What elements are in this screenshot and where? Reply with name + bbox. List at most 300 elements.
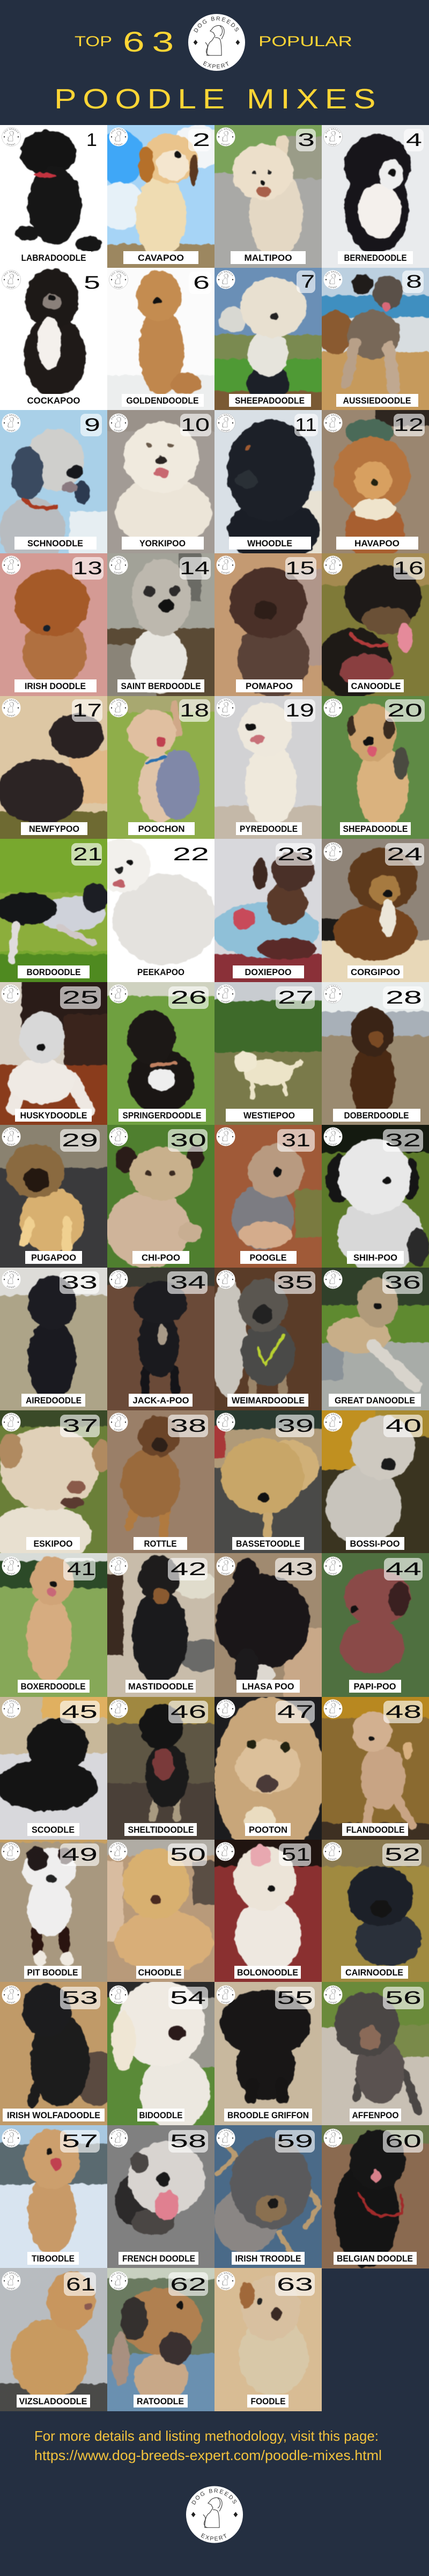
photo (102, 1262, 220, 1418)
photo (0, 262, 113, 418)
number (382, 1843, 421, 1866)
logo: DOG BREEDS (325, 985, 341, 991)
number: 1 (86, 130, 97, 150)
name (346, 1537, 404, 1550)
logo: EXPERT (328, 714, 338, 717)
name (231, 251, 306, 264)
number: 31 (282, 1130, 310, 1151)
name: RATOODLE (137, 2396, 184, 2406)
card 41: boxerdoodle (0, 1548, 113, 1703)
name: POOGLE (250, 1253, 286, 1263)
photo (0, 1692, 113, 1847)
logo (109, 2128, 128, 2148)
card 39: bassetoodle (209, 1405, 327, 1561)
name: POOTON (249, 1825, 287, 1835)
name (240, 1251, 297, 1264)
logo: EXPERT (328, 429, 337, 431)
number (276, 986, 315, 1009)
photo (316, 2120, 429, 2275)
logo: EXPERT (6, 2144, 16, 2147)
name: FOODLE (251, 2396, 285, 2406)
number (382, 1271, 423, 1294)
number: 29 (62, 1130, 98, 1151)
name: BOXERDOODLE (20, 1681, 86, 1692)
card 35: weimardoodle (209, 1262, 327, 1418)
logo (324, 1270, 342, 1289)
logo: EXPERT (328, 1143, 338, 1146)
logo: DOG BREEDS (110, 128, 126, 134)
number (82, 129, 101, 151)
number: 44 (386, 1559, 421, 1579)
number: 3 (298, 130, 315, 150)
number (168, 1558, 208, 1580)
name: SCOODLE (32, 1825, 75, 1835)
title: poodle mixes: POODLE MIXES (54, 84, 382, 115)
photo (209, 1692, 327, 1858)
number: 49 (62, 1845, 98, 1865)
name (134, 1537, 187, 1550)
name: TIBOODLE (32, 2253, 75, 2264)
card 6: goldendoodle (102, 262, 220, 418)
logo: DOG BREEDS (217, 1842, 233, 1849)
logo: DOG BREEDS (3, 2272, 19, 2278)
photo (316, 1119, 429, 1275)
logo: EXPERT (6, 429, 15, 431)
logo: DOG BREEDS (218, 1128, 234, 1134)
number (285, 557, 316, 580)
name: POOCHON (138, 824, 184, 834)
number: 53 (62, 1988, 98, 2008)
logo (217, 2128, 235, 2148)
logo (2, 699, 20, 717)
name (122, 537, 204, 550)
name: BASSETOODLE (236, 1539, 300, 1549)
name (236, 679, 302, 692)
photo (102, 548, 220, 704)
name: SPRINGERDOODLE (122, 1110, 202, 1121)
logo: EXPERT (328, 571, 337, 574)
title word: top: TOP (75, 33, 112, 49)
name: PAPI-POO (354, 1681, 396, 1692)
name (18, 965, 90, 978)
logo: DOG BREEDS (218, 1700, 234, 1706)
logo: DOG BREEDS (325, 2129, 341, 2135)
logo: EXPERT (328, 1285, 338, 1289)
card 45: scoodle (0, 1692, 113, 1847)
number (276, 1701, 315, 1723)
logo (217, 1413, 235, 1432)
photo (102, 1977, 220, 2132)
number: 24 (387, 844, 423, 865)
number: 13 (73, 558, 102, 579)
number: 26 (171, 987, 207, 1008)
logo: DOG BREEDS (325, 128, 341, 134)
name: BOSSI-POO (350, 1539, 400, 1549)
number: 7 (301, 272, 315, 292)
number: 4 (406, 130, 422, 150)
number (168, 1843, 207, 1866)
name: AFFENPOO (352, 2110, 399, 2120)
name: BORDOODLE (27, 967, 80, 977)
name: ROTTLE (144, 1539, 177, 1549)
logo: DOG BREEDS (325, 1557, 341, 1563)
card 63: foodle (209, 2263, 327, 2418)
number: 6 (193, 273, 210, 293)
name: FLANDOODLE (346, 1825, 404, 1835)
number (168, 986, 209, 1009)
logo (324, 1127, 342, 1146)
logo (109, 413, 128, 433)
card 29: pugapoo (0, 1119, 113, 1275)
number (180, 414, 211, 436)
photo (316, 1548, 429, 1703)
name: WESTIEPOO (243, 1110, 295, 1121)
photo (102, 1548, 223, 1703)
logo: DOG BREEDS (110, 1986, 127, 1992)
logo: DOG BREEDS (3, 414, 19, 420)
name (14, 537, 97, 550)
number (60, 2130, 100, 2153)
photo (0, 1834, 113, 1990)
card 26: springerdoodle (102, 977, 220, 1132)
card 51: bolonoodle (209, 1834, 327, 1990)
name: GREAT DANOODLE (335, 1395, 415, 1406)
number: 37 (62, 1416, 98, 1436)
logo (324, 699, 342, 717)
number: 15 (285, 558, 315, 579)
logo (109, 556, 128, 574)
logo: DOG BREEDS (3, 1128, 19, 1134)
name (229, 537, 311, 550)
logo: EXPERT (6, 1715, 16, 1718)
photo (209, 2263, 327, 2418)
photo (0, 1977, 118, 2132)
photo (94, 833, 220, 989)
number: 9 (84, 415, 100, 435)
logo: DOG BREEDS (3, 1270, 19, 1277)
logo (2, 1127, 20, 1146)
logo: EXPERT (221, 2287, 231, 2290)
number (383, 1701, 423, 1723)
logo: EXPERT (6, 143, 15, 146)
number (72, 699, 102, 722)
photo (209, 120, 327, 275)
logo: DOG BREEDS (218, 985, 234, 991)
name: PIT BOODLE (27, 1967, 78, 1978)
logo: DOG BREEDS (3, 699, 19, 705)
number (394, 557, 425, 580)
logo: DOG BREEDS (3, 557, 19, 562)
photo (102, 691, 220, 846)
footer line 1: For more details and listing methodology, visit this page: (34, 2428, 379, 2444)
logo: EXPERT (328, 1857, 337, 1861)
number (60, 1701, 100, 1723)
logo: DOG BREEDS (3, 1557, 19, 1563)
name: SHIH-POO (353, 1253, 397, 1263)
card 43: lhasa poo (209, 1548, 327, 1703)
number (168, 843, 210, 866)
logo (324, 1699, 342, 1718)
logo: EXPERT (114, 1715, 123, 1718)
logo: DOG BREEDS (3, 271, 19, 276)
photo (0, 548, 113, 704)
name: MASTIDOODLE (128, 1681, 194, 1692)
name: AUSSIEDOODLE (343, 396, 411, 406)
name: COCKAPOO (27, 396, 80, 406)
name (236, 1680, 300, 1693)
card 49: pit boodle (0, 1834, 113, 1990)
logo (217, 699, 235, 717)
logo (324, 984, 342, 1004)
logo: EXPERT (114, 429, 122, 431)
logo: EXPERT (6, 571, 15, 574)
card 59: irish troodle (209, 2120, 327, 2275)
name: SCHNOODLE (27, 538, 83, 548)
card 18: poochon (102, 691, 220, 846)
name: BOLONOODLE (237, 1967, 298, 1978)
number (168, 2272, 208, 2296)
logo (216, 1842, 235, 1861)
logo (109, 2271, 128, 2290)
number (168, 1415, 208, 1437)
logo: DOG BREEDS (110, 271, 126, 276)
photo (102, 1692, 220, 1847)
photo (209, 1262, 327, 1418)
number: 30 (170, 1130, 206, 1151)
name: CAVAPOO (138, 253, 184, 263)
logo: DOG BREEDS (324, 1842, 341, 1849)
name (233, 965, 304, 978)
logo: DOG BREEDS (3, 1986, 19, 1992)
name (123, 251, 198, 264)
logo: EXPERT (221, 2144, 231, 2147)
photo (209, 1548, 327, 1703)
name: SHEPADOODLE (343, 824, 408, 834)
logo (109, 270, 128, 289)
number (168, 1987, 208, 2009)
logo (2, 128, 20, 146)
photo (316, 1692, 429, 1847)
card 16: canoodle (316, 548, 429, 704)
card 42: mastidoodle (102, 1548, 223, 1703)
logo: EXPERT (6, 1857, 16, 1861)
name (226, 1109, 313, 1122)
number (79, 272, 104, 294)
photo (102, 262, 220, 418)
photo (0, 691, 113, 846)
logo: dog breeds expert (188, 14, 245, 71)
number: 22 (173, 844, 209, 865)
number: 58 (170, 2131, 206, 2151)
number: 63 (277, 2274, 313, 2295)
logo: DOG BREEDS (325, 1128, 341, 1134)
logo (2, 2271, 20, 2290)
logo: EXPERT (221, 1285, 231, 1289)
logo: DOG BREEDS (110, 557, 126, 562)
photo (316, 405, 429, 560)
name: PUGAPOO (31, 1253, 76, 1263)
logo: EXPERT (221, 1000, 231, 1003)
logo: DOG BREEDS (3, 1700, 19, 1706)
logo: DOG BREEDS (3, 985, 19, 991)
logo: DOG BREEDS (325, 414, 341, 420)
number: 42 (171, 1559, 206, 1579)
card 58: french doodle (102, 2120, 220, 2275)
name (25, 1251, 82, 1264)
number: 61 (66, 2274, 95, 2295)
number: 19 (285, 700, 314, 721)
photo (102, 405, 220, 560)
photo (316, 1262, 429, 1418)
logo: DOG BREEDS (110, 2129, 127, 2135)
logo (2, 556, 20, 574)
logo: DOG BREEDS (110, 1270, 127, 1277)
photo (316, 548, 429, 704)
name: PYREDOODLE (240, 824, 298, 834)
card 27: westiepoo (209, 977, 327, 1132)
number: 25 (62, 987, 99, 1008)
number (275, 1271, 315, 1294)
logo (109, 128, 128, 146)
logo: DOG BREEDS (110, 1557, 127, 1563)
photo (209, 1405, 327, 1561)
number: 38 (170, 1416, 206, 1436)
logo (2, 1270, 20, 1289)
number: 12 (394, 415, 424, 435)
number: 45 (62, 1702, 98, 1722)
name: BERNEDOODLE (344, 253, 406, 263)
name: BROODLE GRIFFON (227, 2110, 309, 2120)
logo: EXPERT (6, 1285, 16, 1289)
number (402, 270, 424, 293)
logo: EXPERT (328, 143, 337, 146)
card 40: bossi-poo (316, 1405, 429, 1561)
logo: EXPERT (114, 1000, 123, 1003)
logo: EXPERT (328, 2144, 338, 2147)
card 25: huskydoodle (0, 977, 113, 1132)
logo (217, 413, 235, 433)
card 57: tiboodle (0, 2120, 113, 2275)
card 22: peekapoo (94, 833, 220, 989)
number (63, 1558, 95, 1580)
logo: EXPERT (6, 1000, 16, 1003)
footer line 2: url: https://www.dog-breeds-expert.com/poodle-mixes.html (34, 2447, 382, 2463)
number (383, 1415, 423, 1437)
number (60, 986, 101, 1009)
card 34: jack-a-poo (102, 1262, 220, 1418)
title word: popular: POPULAR (258, 33, 352, 49)
card 11: whoodle (209, 405, 327, 563)
photo (316, 1405, 429, 1561)
number: 39 (277, 1416, 314, 1436)
name (123, 965, 198, 978)
logo: EXPERT (6, 1143, 16, 1146)
logo: EXPERT (328, 1572, 338, 1575)
number: 41 (67, 1559, 95, 1579)
logo: EXPERT (328, 1715, 338, 1718)
photo (209, 1977, 327, 2132)
logo (217, 1270, 235, 1289)
name: ESKIPOO (33, 1539, 73, 1549)
logo (217, 984, 235, 1004)
logo (2, 270, 20, 289)
logo: DOG BREEDS (3, 128, 19, 134)
number: 11 (295, 415, 317, 435)
photo (209, 1834, 327, 1990)
logo (324, 843, 342, 861)
header title block (54, 14, 382, 115)
logo: DOG BREEDS (325, 1270, 341, 1277)
logo: DOG BREEDS (110, 1700, 127, 1706)
number (383, 1987, 424, 2009)
card 17: newfypoo (0, 691, 113, 846)
logo (217, 1127, 235, 1146)
name: WEIMARDOODLE (232, 1395, 305, 1406)
name: YORKIPOO (139, 538, 186, 548)
card 47: pooton (209, 1692, 327, 1858)
card 24: corgipoo (316, 833, 429, 989)
number (275, 1987, 315, 2009)
logo: EXPERT (328, 286, 337, 289)
photo (0, 1119, 113, 1275)
number: 57 (62, 2131, 98, 2151)
number: 14 (180, 558, 210, 579)
logo (2, 1413, 20, 1432)
logo: DOG BREEDS (3, 1842, 19, 1849)
number (275, 2272, 315, 2296)
logo: EXPERT (114, 1428, 123, 1431)
number: 28 (386, 987, 422, 1008)
logo (217, 2271, 235, 2290)
card 4: bernedoodle (316, 120, 429, 275)
number: 33 (61, 1272, 98, 1293)
logo: EXPERT (220, 1857, 230, 1861)
name: POMAPOO (246, 681, 293, 691)
logo (324, 1413, 342, 1432)
name: AIREDOODLE (26, 1395, 82, 1406)
photo (0, 2120, 113, 2275)
logo (109, 1556, 128, 1576)
card 3: maltipoo (209, 120, 327, 275)
photo (209, 977, 327, 1132)
photo (102, 1405, 220, 1561)
logo (1, 984, 20, 1004)
logo: EXPERT (6, 2287, 16, 2290)
logo: EXPERT (221, 571, 230, 574)
logo: EXPERT (114, 2287, 123, 2290)
photo (0, 1548, 113, 1703)
photo (209, 691, 327, 846)
card 33: airedoodle (0, 1262, 113, 1418)
name: IRISH DOODLE (25, 681, 86, 691)
logo: EXPERT (221, 714, 230, 717)
photo (316, 120, 429, 275)
logo (109, 699, 128, 717)
card 46: sheltidoodle (102, 1692, 220, 1847)
logo: EXPERT (114, 2144, 123, 2147)
card 56: affenpoo (316, 1977, 429, 2132)
name (128, 822, 195, 835)
logo: DOG BREEDS (110, 1842, 126, 1849)
logo (108, 1842, 128, 1861)
name: NEWFYPOO (29, 824, 79, 834)
logo: EXPERT (6, 1572, 16, 1575)
photo (102, 1119, 220, 1275)
logo (109, 1270, 128, 1289)
logo: DOG BREEDS (325, 557, 341, 562)
name (14, 679, 97, 692)
name: HUSKYDOODLE (20, 1110, 87, 1121)
